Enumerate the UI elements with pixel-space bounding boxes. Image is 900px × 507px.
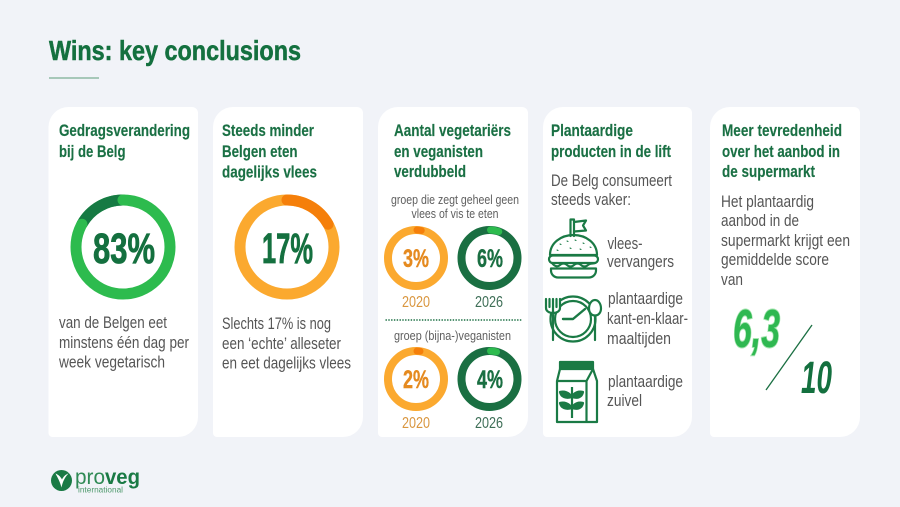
- heading: vegetarians and vegans doubled: en veganisten: [394, 143, 483, 161]
- label: ready-made plant-based meals: plantaardige: [608, 290, 683, 308]
- heading: plant-based products: [551, 122, 671, 161]
- label: ready-made plant-based meals: [607, 290, 688, 348]
- donut chart: 83%: 83%: [93, 225, 155, 273]
- panel: behaviour change: [48, 107, 198, 437]
- donut chart: 4% in 2026: 4%: [477, 366, 503, 394]
- label: no meat or fish group: vlees of vis te eten: [412, 206, 498, 221]
- heading: less daily meat: [222, 122, 317, 182]
- label: meat substitutes: [607, 235, 674, 271]
- panel: supermarket satisfaction: [710, 107, 860, 437]
- donut chart: 6% in 2026: [462, 230, 518, 311]
- donut chart: 17%: [240, 200, 334, 294]
- donut chart: 6% in 2026: 2026: [475, 294, 503, 311]
- panel: less daily meat: [213, 107, 363, 437]
- text: behaviour change description: week vegetarisch: [58, 354, 165, 372]
- icon: milk carton with plant: [557, 362, 597, 422]
- text: less daily meat description: Slechts 17% is nog: [222, 315, 331, 333]
- panel: vegetarians and vegans doubled: [378, 107, 528, 437]
- heading: supermarket satisfaction: over het aanbod in: [722, 143, 840, 161]
- donut chart: 6% in 2026: 6%: [477, 245, 503, 273]
- donut chart: 2% in 2020: 2%: [403, 366, 429, 394]
- text: supermarket description: [721, 193, 850, 289]
- logo: ProVeg International: veg: [105, 466, 140, 489]
- icon: clock plate with cutlery: [546, 296, 601, 342]
- score: 6,3 out of 10: 6,3: [733, 299, 780, 359]
- label: ready-made plant-based meals: maaltijden: [607, 330, 671, 348]
- donut chart: 2% in 2020: 2020: [402, 415, 430, 432]
- label: meat substitutes: vervangers: [607, 253, 674, 271]
- score: 6,3 out of 10: [733, 299, 832, 403]
- donut chart: 83%: [76, 194, 170, 294]
- heading: less daily meat: dagelijks vlees: [222, 164, 317, 182]
- text: behaviour change description: minstens één dag per: [59, 334, 189, 352]
- text: less daily meat description: en eet dagelijks vlees: [222, 354, 351, 372]
- text: supermarket description: van: [721, 271, 743, 289]
- text: behaviour change description: van de Belgen eet: [59, 314, 167, 332]
- text: supermarket description: supermarkt krijgt een: [721, 232, 850, 250]
- donut chart: 4% in 2026: [462, 351, 518, 432]
- label: ready-made plant-based meals: kant-en-klaar-: [607, 310, 688, 328]
- label: plant-based dairy: plantaardige: [608, 373, 683, 391]
- heading: supermarket satisfaction: Meer tevredenheid: [722, 122, 842, 140]
- donut chart: 3% in 2020: 3%: [403, 245, 429, 273]
- text: consumption intro: [551, 172, 672, 209]
- donut chart: 4% in 2026: 2026: [475, 415, 503, 432]
- title: Wins: key conclusions: [49, 35, 301, 66]
- text: consumption intro: De Belg consumeert: [551, 172, 672, 190]
- heading: vegetarians and vegans doubled: [394, 122, 511, 181]
- panel: plant-based products: [543, 107, 692, 437]
- heading: behaviour change: [59, 122, 190, 161]
- text: supermarket description: aanbod in de: [721, 212, 799, 230]
- text: supermarket description: gemiddelde score: [721, 251, 829, 269]
- heading: behaviour change: bij de Belg: [59, 143, 126, 161]
- heading: behaviour change: Gedragsverandering: [59, 122, 190, 140]
- heading: supermarket satisfaction: [722, 122, 842, 181]
- donut chart: 3% in 2020: [388, 230, 444, 311]
- text: less daily meat description: een ‘echte’ alleseter: [222, 335, 341, 353]
- donut chart: 2% in 2020: [388, 351, 444, 432]
- heading: less daily meat: Steeds minder: [222, 122, 314, 140]
- heading: supermarket satisfaction: de supermarkt: [722, 163, 815, 181]
- score: 6,3 out of 10: 10: [801, 352, 832, 403]
- donut chart: 3% in 2020: 2020: [402, 294, 430, 311]
- label: no meat or fish group: groep die zegt geheel geen: [391, 192, 519, 207]
- donut chart: 17%: 17%: [262, 225, 313, 273]
- icon: burger: [549, 220, 598, 278]
- heading: plant-based products: Plantaardige: [551, 122, 633, 140]
- heading: less daily meat: Belgen eten: [222, 143, 298, 161]
- heading: plant-based products: producten in de lift: [551, 143, 671, 161]
- text: supermarket description: Het plantaardig: [721, 193, 814, 211]
- label: meat substitutes: vlees-: [608, 235, 642, 253]
- label: near-vegan group: groep (bijna-)veganisten: [394, 328, 511, 343]
- text: behaviour change description: [58, 314, 189, 372]
- logo: ProVeg International: [51, 466, 140, 494]
- text: consumption intro: steeds vaker:: [551, 191, 631, 209]
- logo: ProVeg International: pro: [75, 466, 105, 489]
- heading: vegetarians and vegans doubled: Aantal vegetariërs: [394, 122, 511, 140]
- label: plant-based dairy: zuivel: [607, 392, 642, 410]
- text: less daily meat description: [222, 315, 351, 372]
- logo: ProVeg International: international: [78, 486, 123, 494]
- label: plant-based dairy: [607, 373, 683, 410]
- label: no meat or fish group: [391, 192, 519, 221]
- heading: vegetarians and vegans doubled: verdubbeld: [394, 163, 466, 181]
